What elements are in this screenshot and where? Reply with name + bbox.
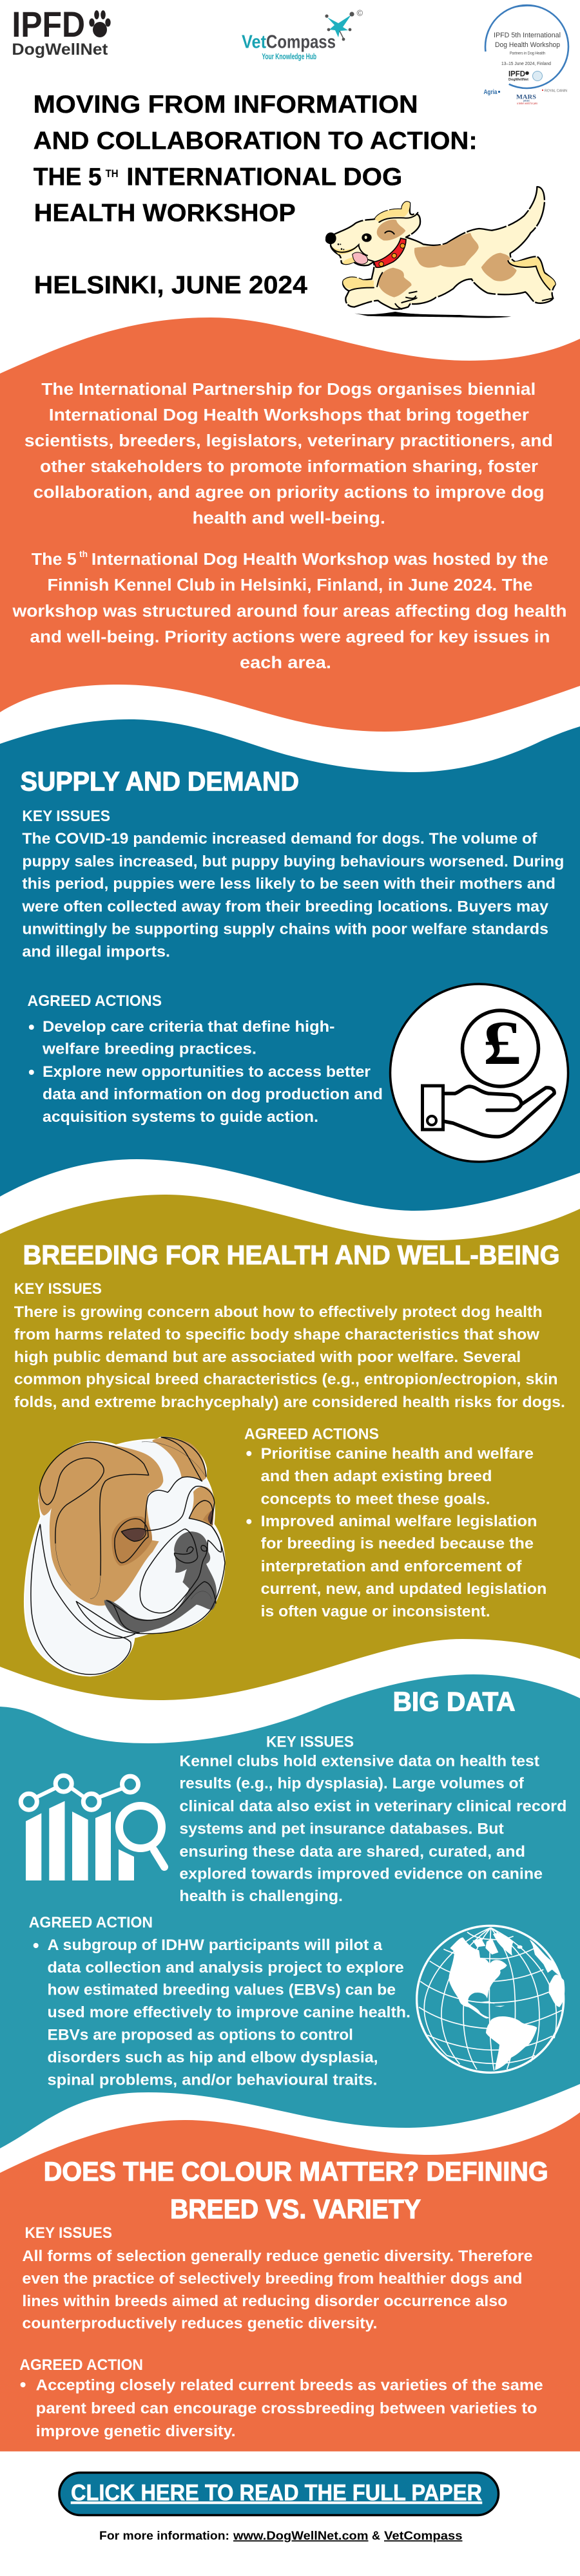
logo: IPFD DogWellNet [12,4,111,59]
logo: VetCompass: Your Knowledge Hub [262,52,316,61]
agreed action: AGREED ACTION [29,1914,153,1931]
logo: IPFD workshop badge: Agria [483,89,498,96]
key issues: results (e.g., hip dysplasia). Large volumes of [179,1775,525,1792]
intro paragraph 2: and well-being. Priority actions were agreed for key issues in [30,629,550,647]
key issues: folds, and extreme brachycephaly) are considered health risks for dogs. [14,1394,565,1411]
heading [44,2156,548,2224]
agreed actions: for breeding is needed because the [261,1535,534,1553]
key issues: even the practice of selectively breeding from healthier dogs and [22,2270,522,2287]
key issues: from harms related to specific body shape characteristics that show [14,1326,540,1343]
intro paragraph 1 [24,381,553,527]
agreed actions: current, new, and updated legislation [261,1580,546,1598]
agreed action [19,2356,543,2440]
title: HEALTH WORKSHOP [34,200,296,227]
logo: VetCompass: Vet [242,32,266,53]
footer: more information: & [372,2530,380,2543]
agreed actions: Develop care criteria that define high- [43,1018,335,1036]
intro paragraph 2: International Dog Health Workshop was hosted by the [92,551,548,569]
agreed action: how estimated breeding values (EBVs) can be [48,1982,396,1999]
heading: BIG DATA [393,1686,516,1716]
key issues: systems and pet insurance databases. But [179,1821,504,1838]
key issues: high public demand but are associated with poor welfare. Several [14,1349,521,1366]
key issues: KEY ISSUES [266,1733,354,1750]
heading: BREEDING FOR HEALTH AND WELL-BEING [23,1240,560,1270]
key issues: KEY ISSUES [24,2224,112,2242]
icon: paw print [89,10,111,37]
agreed action: spinal problems, and/or behavioural traits. [48,2071,378,2089]
intro paragraph 2 [12,549,566,672]
key issues: There is growing concern about how to effectively protect dog health [14,1303,543,1321]
logo: IPFD workshop badge: MARS [516,94,536,100]
panel: introduction [0,317,580,732]
agreed actions: and then adapt existing breed [261,1468,492,1485]
intro paragraph 1: International Dog Health Workshops that bring together [49,406,529,424]
agreed action: parent breed can encourage crossbreeding between varieties to [36,2400,537,2418]
logo: IPFD DogWellNet: IPFD [12,4,85,44]
key issues: The COVID-19 pandemic increased demand for dogs. The volume of [22,830,537,848]
footer: more information [99,2530,463,2543]
header: partner logos [12,4,568,105]
agreed action: disorders such as hip and elbow dysplasia, [48,2049,378,2066]
agreed action: A subgroup of IDHW participants will pilot a [48,1937,382,1954]
agreed actions [27,992,383,1126]
logo: IPFD workshop badge: a better world for pets [517,102,538,105]
intro paragraph 2: Finnish Kennel Club in Helsinki, Finland, in June 2024. The [48,576,532,594]
agreed actions: data and information on dog production and [43,1086,383,1103]
key issues: this period, puppies were less likely to be seen with their mothers and [22,875,556,893]
intro paragraph 2: each area. [240,654,331,672]
key issues: unwittingly be supporting supply chains with poor welfare standards [22,921,548,938]
panel: breeding for health and well-being [0,1195,580,1700]
logo: IPFD workshop badge: Dog Health Workshop [495,41,560,49]
key issues: health is challenging. [179,1888,343,1905]
heading: SUPPLY AND DEMAND [21,766,299,796]
heading: BREED VS. VARIETY [170,2193,421,2224]
title: HELSINKI, JUNE 2024 [34,271,307,299]
key issues [22,2224,533,2333]
agreed action: Accepting closely related current breeds as varieties of the same [36,2377,543,2394]
key issues: puppy sales increased, but puppy buying behaviours worsened. During [22,853,564,870]
title [34,91,478,299]
footer: more information: www.DogWellNet.com [233,2530,369,2543]
logo: VetCompass: Compass [266,32,336,53]
button: read the full paper: CLICK HERE TO READ THE FULL PAPER [71,2481,482,2505]
agreed actions: is often vague or inconsistent. [261,1603,490,1620]
intro paragraph 2: The 5 [32,551,77,569]
key issues [14,1280,565,1411]
agreed actions: welfare breeding practices. [42,1041,256,1058]
logo: VetCompass [242,8,363,61]
panel: supply and demand [0,719,580,1211]
key issues: common physical breed characteristics (e.g., entropion/ectropion, skin [14,1371,558,1388]
logo: IPFD workshop badge: Partners in Dog Health [510,52,545,55]
agreed action: AGREED ACTION [19,2356,143,2374]
title: THE 5 [34,164,102,191]
icon: data chart with magnifier [21,1776,164,1880]
agreed actions: concepts to meet these goals. [261,1490,490,1508]
agreed actions: interpretation and enforcement of [261,1558,522,1575]
intro paragraph 2: workshop was structured around four areas affecting dog health [12,603,566,621]
logo: IPFD DogWellNet: DogWellNet [12,41,108,59]
key issues: explored towards improved evidence on canine [179,1866,543,1883]
icon: VetCompass star [325,8,363,41]
intro paragraph 1: health and well-being. [192,509,385,527]
footer: more information: For more information: [99,2530,229,2543]
title: INTERNATIONAL DOG [126,164,402,191]
key issues: All forms of selection generally reduce genetic diversity. Therefore [22,2248,533,2265]
logo: IPFD workshop badge [483,5,568,105]
icon: globe [417,1926,565,2072]
key issues: clinical data also exist in veterinary clinical record [179,1797,566,1815]
intro paragraph 1: The International Partnership for Dogs organises biennial [41,381,536,399]
logo: IPFD workshop badge: ROYAL CANIN [545,89,567,93]
illustration: bulldog [24,1437,225,1676]
agreed actions: AGREED ACTIONS [244,1426,379,1443]
heading: DOES THE COLOUR MATTER? DEFINING [44,2156,548,2186]
key issues: were often collected away from their breeding locations. Buyers may [21,898,548,916]
icon: hand holding pound coin: £ [483,1009,521,1078]
icon: hand holding pound coin [391,984,568,1162]
agreed action: EBVs are proposed as options to control [48,2027,353,2044]
agreed action [29,1914,411,2089]
agreed actions: Explore new opportunities to access better [43,1063,371,1081]
key issues: Kennel clubs hold extensive data on health test [179,1753,539,1770]
panel: big data [0,1674,580,2148]
intro paragraph 1: collaboration, and agree on priority actions to improve dog [34,484,545,502]
key issues: counterproductively reduces genetic diversity. [22,2315,377,2333]
logo: IPFD workshop badge: DogWellNet [508,78,528,82]
key issues: and illegal imports. [22,943,170,960]
key issues: lines within breeds aimed at reducing disorder occurrence also [22,2293,508,2310]
agreed actions: Improved animal welfare legislation [261,1513,537,1530]
logo: IPFD workshop badge: IPFD [508,71,525,79]
key issues: KEY ISSUES [14,1280,102,1298]
logo: IPFD workshop badge: IPFD 5th International [494,32,561,39]
footer: more information: VetCompass [384,2530,463,2543]
agreed action: improve genetic diversity. [36,2423,236,2440]
intro paragraph 2: th [79,549,88,559]
agreed actions: AGREED ACTIONS [27,992,162,1010]
illustration: running dog [325,187,556,318]
key issues: KEY ISSUES [22,808,110,825]
button: read the full paper [59,2473,499,2515]
key issues: ensuring these data are shared, curated, and [179,1843,525,1861]
panel: does the colour matter [0,2112,580,2451]
title: MOVING FROM INFORMATION [34,91,418,118]
agreed actions [244,1426,546,1620]
logo: IPFD workshop badge: 13–15 June 2024, Finland [501,61,551,66]
agreed action: used more effectively to improve canine health. [48,2003,411,2021]
title: AND COLLABORATION TO ACTION: [34,127,478,155]
logo: IPFD workshop badge: petcare [523,99,530,102]
icon: VetCompass star: © [357,8,363,18]
intro paragraph 1: other stakeholders to promote information sharing, foster [40,458,538,476]
key issues [179,1733,566,1905]
intro paragraph 1: scientists, breeders, legislators, veterinary practitioners, and [24,432,553,450]
agreed actions: Prioritise canine health and welfare [261,1445,534,1463]
title: TH [106,167,119,180]
agreed actions: acquisition systems to guide action. [43,1108,318,1126]
agreed action: data collection and analysis project to explore [48,1959,404,1976]
key issues [21,808,564,960]
